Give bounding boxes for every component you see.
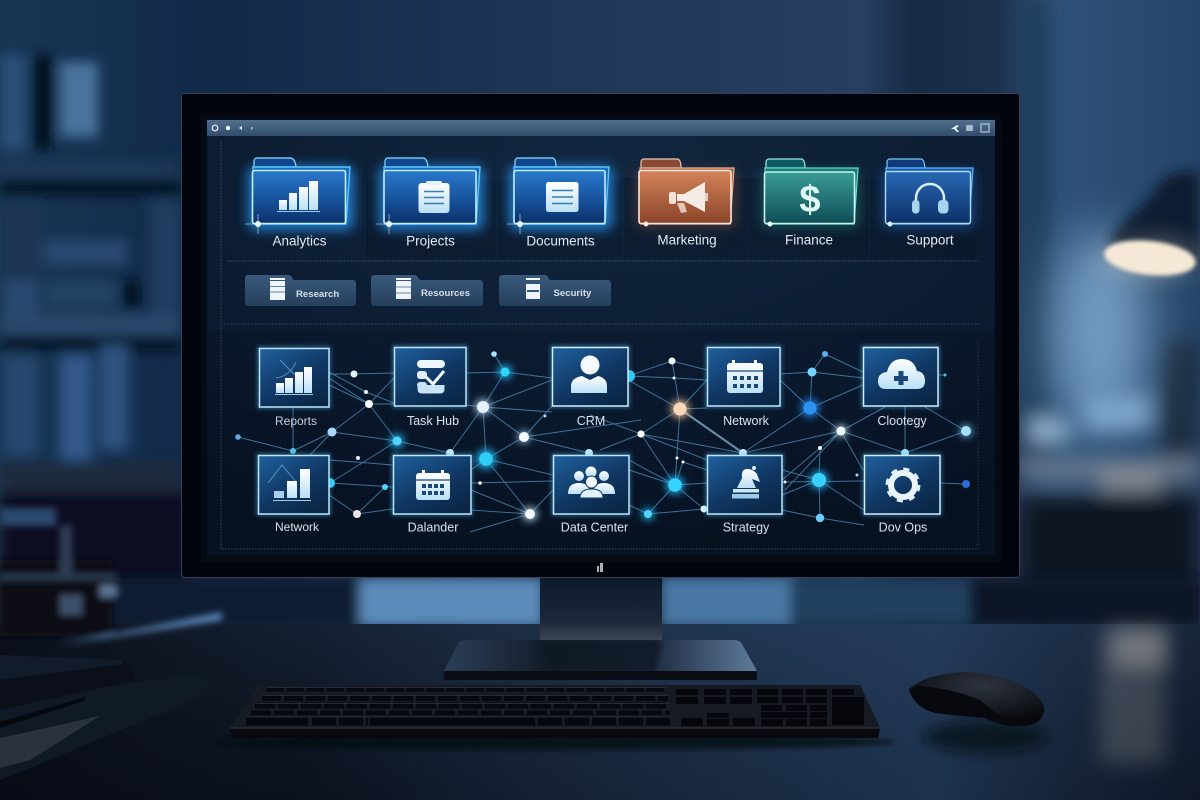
- tile: CRM: CRM: [577, 414, 605, 428]
- folder: Finance: $: [799, 179, 821, 221]
- small folder: Research: Research: [296, 289, 339, 300]
- tile: Network calendar: Network: [723, 414, 770, 428]
- screen frame dashed guides: [221, 142, 980, 549]
- tile: Network calendar: [708, 348, 780, 428]
- lamp shade and shine: [1108, 171, 1200, 268]
- right window glow: [1020, 0, 1200, 630]
- folder: Finance: Finance: [785, 232, 833, 248]
- folder: Documents: Documents: [526, 234, 595, 248]
- tile: Reports: Reports: [275, 414, 317, 428]
- monitor stand: [444, 578, 757, 680]
- folder: Documents: [507, 158, 613, 248]
- folder: Support: [882, 159, 975, 248]
- folder: Finance: [761, 159, 860, 248]
- tile: Reports: [260, 348, 329, 428]
- small folder: Resources: [371, 275, 483, 306]
- tile glow halos: [258, 347, 940, 514]
- network connection lines: [238, 354, 966, 532]
- tile: CRM: [552, 348, 628, 428]
- screen: [207, 120, 995, 555]
- desk surface: [0, 624, 1200, 800]
- folder: Projects: Projects: [406, 234, 455, 248]
- tile: Dov Ops: [864, 456, 940, 534]
- small folder: Security: Security: [554, 288, 592, 299]
- tile: Dov Ops: Dov Ops: [879, 520, 927, 534]
- mouse: [909, 672, 1047, 753]
- keyboard: [215, 685, 895, 750]
- tile row two: [258, 456, 940, 534]
- tile: Cloud: [864, 348, 938, 428]
- tile: Data Center: [554, 456, 629, 534]
- strip under the monitor: [0, 578, 1200, 628]
- tile: Network bars: Network: [275, 520, 320, 534]
- small folder: Security: [499, 275, 611, 306]
- network nodes: [235, 351, 971, 522]
- folder: Projects: [376, 158, 484, 248]
- folder: Analytics: [245, 158, 354, 248]
- tile: Task Hub: Task Hub: [407, 414, 459, 428]
- small folder row: [245, 275, 611, 306]
- notebook and pen at left: [0, 655, 212, 780]
- small folder: Research: [245, 275, 356, 306]
- tile: Dalander: Dalander: [408, 520, 458, 534]
- brand mark: [597, 563, 603, 572]
- tile row one: [260, 348, 938, 428]
- folder row: [245, 158, 979, 258]
- network node glows: [390, 365, 972, 521]
- blurred desk device at left: [0, 508, 222, 646]
- tile: Network bars: [258, 456, 329, 534]
- small folder: Resources: Resources: [421, 288, 470, 299]
- tile: Strategy: Strategy: [723, 520, 770, 534]
- tile: Dalander: [394, 456, 471, 534]
- folder: Marketing: Marketing: [657, 232, 717, 248]
- tile: Strategy: [708, 456, 782, 534]
- bookshelf, blurred: [0, 55, 190, 632]
- window title bar: [207, 120, 995, 136]
- folder: Marketing: [636, 159, 736, 248]
- tile: Task Hub: [394, 348, 466, 428]
- folder: Support: Support: [906, 232, 954, 248]
- tile: Data Center: Data Center: [561, 520, 628, 534]
- folder: Analytics: Analytics: [272, 234, 327, 248]
- monitor: [181, 93, 1020, 578]
- blurred office background: [0, 0, 1200, 640]
- folder card shading: [366, 178, 979, 258]
- tile: Cloud: Clootegy: [877, 414, 927, 428]
